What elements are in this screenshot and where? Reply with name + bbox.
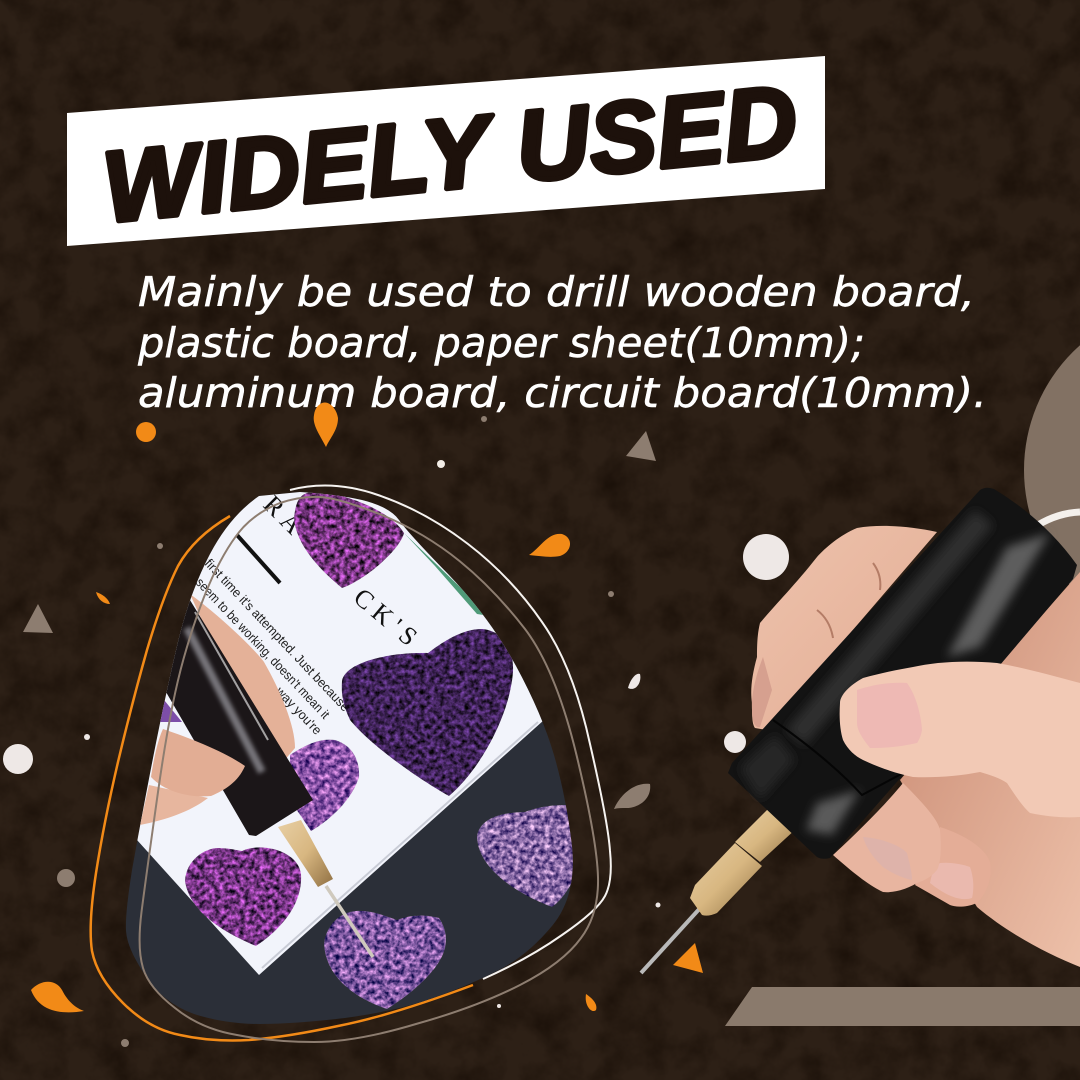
body text: aluminum board, circuit board(10mm). — [138, 369, 987, 417]
body text: plastic board, paper sheet(10mm); — [137, 319, 865, 367]
barrel seam — [773, 720, 903, 795]
black drill body — [166, 592, 313, 836]
amethyst heart left — [185, 847, 301, 946]
scattered confetti decorations — [3, 402, 789, 1047]
palm and wrist — [900, 572, 1080, 967]
magazine text: way you're — [272, 683, 325, 738]
photo: drill on amethyst hearts: RA — [258, 490, 312, 544]
brass chuck front — [690, 843, 762, 916]
finger behind drill — [190, 594, 295, 762]
beige outline over photo — [140, 497, 598, 1042]
small purple behind drill — [160, 700, 182, 722]
upper fingers — [751, 526, 937, 730]
open magazine page — [137, 480, 544, 975]
black drill body — [728, 488, 1077, 859]
title banner — [67, 56, 825, 246]
body text — [137, 268, 987, 417]
title text: WIDELY USED — [98, 65, 802, 244]
brass chuck rear — [735, 805, 797, 862]
barrel highlights — [947, 533, 1050, 657]
decorative beige circle at right edge — [1024, 303, 1080, 637]
finger crease — [817, 563, 880, 638]
lower finger nail 2 — [930, 863, 973, 899]
thumb — [840, 662, 1080, 817]
fingernail left — [752, 657, 772, 727]
photo: hand holding mini drill — [641, 488, 1080, 973]
thumbnail — [857, 683, 922, 748]
lower finger 2 — [915, 827, 991, 907]
green plant corner — [404, 533, 490, 616]
page edge — [262, 722, 538, 968]
white outline around photo — [290, 486, 611, 979]
drill bit — [326, 886, 373, 957]
lower finger 1 — [833, 783, 941, 892]
magazine heading letters: CK'S — [348, 582, 428, 656]
lower finger nail 1 — [863, 837, 912, 880]
brass chuck — [278, 820, 333, 887]
amethyst heart large — [342, 629, 513, 796]
drill bit — [641, 906, 702, 973]
magazine text: seem to be working, doesn't mean it — [193, 575, 333, 722]
orange outline around photo — [91, 516, 473, 1040]
amethyst heart bottom — [324, 911, 446, 1009]
amethyst heart mid — [290, 740, 359, 831]
magazine text: first time it's attempted. Just because — [202, 556, 353, 714]
body text: Mainly be used to drill wooden board, — [138, 268, 975, 316]
amethyst heart top — [294, 492, 404, 588]
decorative beige bar bottom right — [725, 987, 1080, 1026]
photo: drill on amethyst hearts — [126, 492, 573, 1024]
lower finger — [140, 785, 208, 825]
thumb on drill — [151, 729, 245, 796]
amethyst heart right — [477, 805, 575, 907]
black rule line — [237, 535, 280, 583]
white arc behind drill — [1038, 512, 1080, 525]
